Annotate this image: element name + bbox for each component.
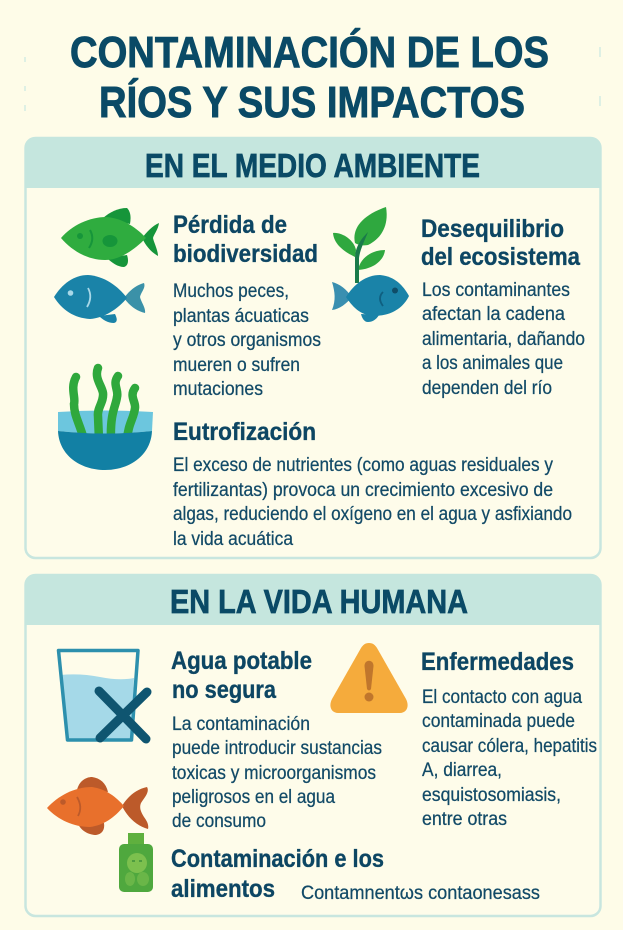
icon: warning triangle <box>330 643 408 713</box>
text: pérdida de biodiversidad: plantas ácuaticas <box>173 306 309 327</box>
icon: blue fish <box>54 275 145 323</box>
text: agua potable no segura: La contaminación <box>172 714 310 735</box>
section header: vida humana <box>25 574 601 625</box>
text: agua potable no segura: de consumo <box>172 811 266 832</box>
text: pérdida de biodiversidad: mutaciones <box>173 379 263 400</box>
text: enfermedades: esquistosomiasis, <box>422 785 561 806</box>
text: agua potable no segura: puede introducir sustancias <box>172 738 382 759</box>
text: desequilibrio del ecosistema: alimentaria, dañando <box>422 329 585 350</box>
text: agua potable no segura <box>171 647 382 832</box>
text: agua potable no segura: Agua potable <box>171 647 312 675</box>
text: enfermedades: entre otras <box>422 809 507 830</box>
text: eutrofización: Eutrofización <box>173 418 316 446</box>
section header: vida humana: EN LA VIDA HUMANA <box>170 584 468 621</box>
text: contaminación de los alimentos: Contaminación e los <box>171 845 384 873</box>
text: pérdida de biodiversidad: biodiversidad <box>173 240 318 268</box>
icon: green fish <box>61 208 159 267</box>
text: desequilibrio del ecosistema: Desequilibrio <box>421 215 564 243</box>
text: enfermedades: contaminada puede <box>422 711 575 732</box>
text: enfermedades: Enfermedades <box>421 648 574 676</box>
text: eutrofización: fertilizantas) provoca un crecimiento excesivo de <box>173 480 553 501</box>
text: eutrofización: algas, reduciendo el oxígeno en el agua y asfixiando <box>173 504 572 525</box>
text: agua potable no segura: peligrosos en el agua <box>172 787 335 808</box>
icon: orange fish <box>47 777 148 835</box>
text: eutrofización: la vida acuática <box>173 529 293 550</box>
text: contaminación de los alimentos: Contamnentωs contaonesass <box>301 883 540 904</box>
text: enfermedades: El contacto con agua <box>422 687 582 708</box>
text: desequilibrio del ecosistema: dependen del río <box>422 378 552 399</box>
text: pérdida de biodiversidad: y otros organismos <box>173 330 321 351</box>
text: desequilibrio del ecosistema: del ecosistema <box>421 243 581 271</box>
text: pérdida de biodiversidad <box>173 211 321 400</box>
title <box>70 27 549 127</box>
panel: en la vida humana <box>25 574 601 916</box>
text: enfermedades <box>421 648 597 830</box>
text: desequilibrio del ecosistema: afectan la cadena <box>422 304 565 325</box>
text: pérdida de biodiversidad: Muchos peces, <box>173 281 289 302</box>
text: contaminación de los alimentos: alimentos <box>171 875 275 903</box>
text: agua potable no segura: toxicas y microorganismos <box>172 763 376 784</box>
text: desequilibrio del ecosistema <box>421 215 585 399</box>
title: CONTAMINACIÓN DE LOS <box>70 27 549 77</box>
text: eutrofización <box>173 418 572 550</box>
text: enfermedades: A, diarrea, <box>422 760 502 781</box>
text: desequilibrio del ecosistema: Los contaminantes <box>422 280 570 301</box>
section header: medio ambiente <box>25 137 601 188</box>
icon: water glass with cross <box>58 650 147 740</box>
icon: plant and fish <box>332 207 409 322</box>
panel: en el medio ambiente <box>25 137 601 558</box>
text: agua potable no segura: no segura <box>172 676 277 704</box>
icon: algae in water bowl <box>58 368 153 470</box>
text: pérdida de biodiversidad: Pérdida de <box>173 211 287 239</box>
text: eutrofización: El exceso de nutrientes (como aguas residuales y <box>173 455 553 476</box>
icon: contaminated bottle <box>119 833 153 892</box>
text: desequilibrio del ecosistema: a los animales que <box>422 353 563 374</box>
title: RÍOS Y SUS IMPACTOS <box>99 77 525 127</box>
text: pérdida de biodiversidad: mueren o sufren <box>173 355 300 376</box>
text: contaminación de los alimentos <box>171 845 540 904</box>
section header: medio ambiente: EN EL MEDIO AMBIENTE <box>145 148 480 185</box>
text: enfermedades: causar cólera, hepatitis <box>422 736 597 757</box>
